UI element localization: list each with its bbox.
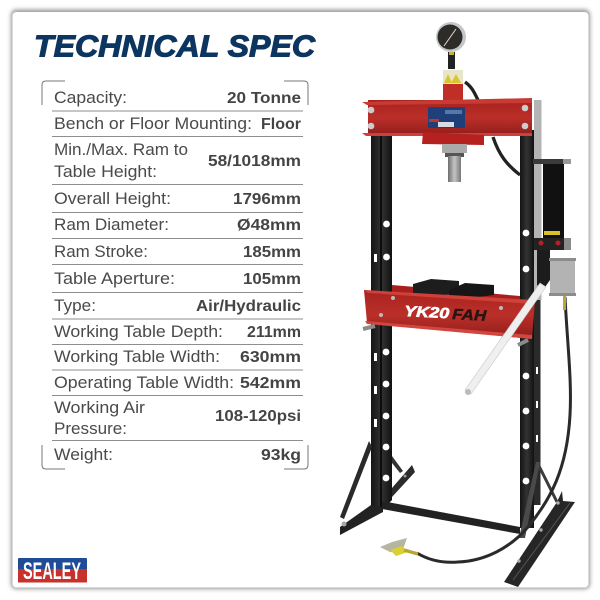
gauge — [436, 22, 466, 69]
air pump unit — [533, 159, 576, 310]
table corner brackets — [42, 81, 308, 469]
row: working table width: 630mm — [240, 349, 301, 366]
top beam — [362, 98, 532, 136]
ram head — [422, 132, 484, 182]
row: operating table width: Operating Table Width: — [54, 374, 234, 392]
row: working table width: Working Table Width: — [54, 348, 220, 366]
row: type: Type: — [54, 297, 96, 315]
row: operating table width — [54, 374, 301, 392]
model label — [404, 303, 488, 325]
row: working air pressure: 108-120psi — [215, 408, 301, 425]
blue data plate — [428, 107, 465, 128]
logo: Sealey: SEALEY — [23, 558, 81, 585]
air coupler — [380, 538, 418, 556]
row: working air pressure: Pressure: — [54, 420, 127, 438]
row: capacity: 20 Tonne — [227, 90, 301, 107]
row: working table depth — [54, 323, 301, 341]
row: operating table width: 542mm — [240, 375, 301, 392]
row: working air pressure: Working Air — [54, 399, 146, 417]
left column — [371, 130, 392, 511]
row: ram stroke: 185mm — [243, 244, 301, 261]
row: overall height: 1796mm — [233, 191, 301, 208]
row: ram diameter: Ø48mm — [237, 217, 301, 234]
row: ram to table height: 58/1018mm — [208, 153, 301, 170]
row: capacity: Capacity: — [54, 89, 127, 107]
left feet — [340, 505, 383, 535]
row: overall height — [54, 190, 301, 208]
row: ram diameter — [54, 216, 301, 234]
row: weight: Weight: — [54, 446, 113, 464]
row: type: Air/Hydraulic — [196, 298, 301, 315]
title: TECHNICAL SPEC — [34, 28, 316, 64]
row: ram to table height — [54, 141, 301, 181]
hydraulic press illustration — [340, 22, 576, 587]
row: ram to table height: Min./Max. Ram to — [54, 141, 188, 159]
right foot — [504, 491, 575, 587]
row: weight — [54, 446, 301, 464]
lower table beam — [363, 279, 535, 345]
row: table aperture — [54, 270, 301, 288]
row: mounting: Floor — [261, 116, 301, 133]
model label: FAH — [452, 306, 488, 325]
oil hose — [465, 82, 520, 175]
row: type — [54, 297, 301, 315]
row: table aperture: 105mm — [243, 271, 301, 288]
row: overall height: Overall Height: — [54, 190, 171, 208]
row: weight: 93kg — [261, 447, 301, 464]
ram cylinder — [443, 70, 463, 100]
row: working table width — [54, 348, 301, 366]
row: ram to table height: Table Height: — [54, 163, 157, 181]
air hose — [417, 297, 570, 562]
logo: Sealey — [18, 558, 87, 585]
row: ram stroke: Ram Stroke: — [54, 243, 148, 261]
right column — [520, 130, 534, 528]
row: working table depth: Working Table Depth: — [54, 323, 223, 341]
row: working table depth: 211mm — [247, 324, 301, 341]
model label: YK20 — [404, 303, 450, 322]
pump handle — [465, 283, 546, 395]
spec table — [52, 89, 303, 464]
row: mounting: Bench or Floor Mounting: — [54, 115, 252, 133]
row: capacity — [54, 89, 301, 107]
row: table aperture: Table Aperture: — [54, 270, 175, 288]
press blocks — [413, 279, 494, 299]
row: ram diameter: Ram Diameter: — [54, 216, 169, 234]
rear right flange — [534, 100, 542, 300]
row: working air pressure — [54, 399, 301, 438]
row: ram stroke — [54, 243, 301, 261]
bottom cross bar — [382, 501, 520, 534]
